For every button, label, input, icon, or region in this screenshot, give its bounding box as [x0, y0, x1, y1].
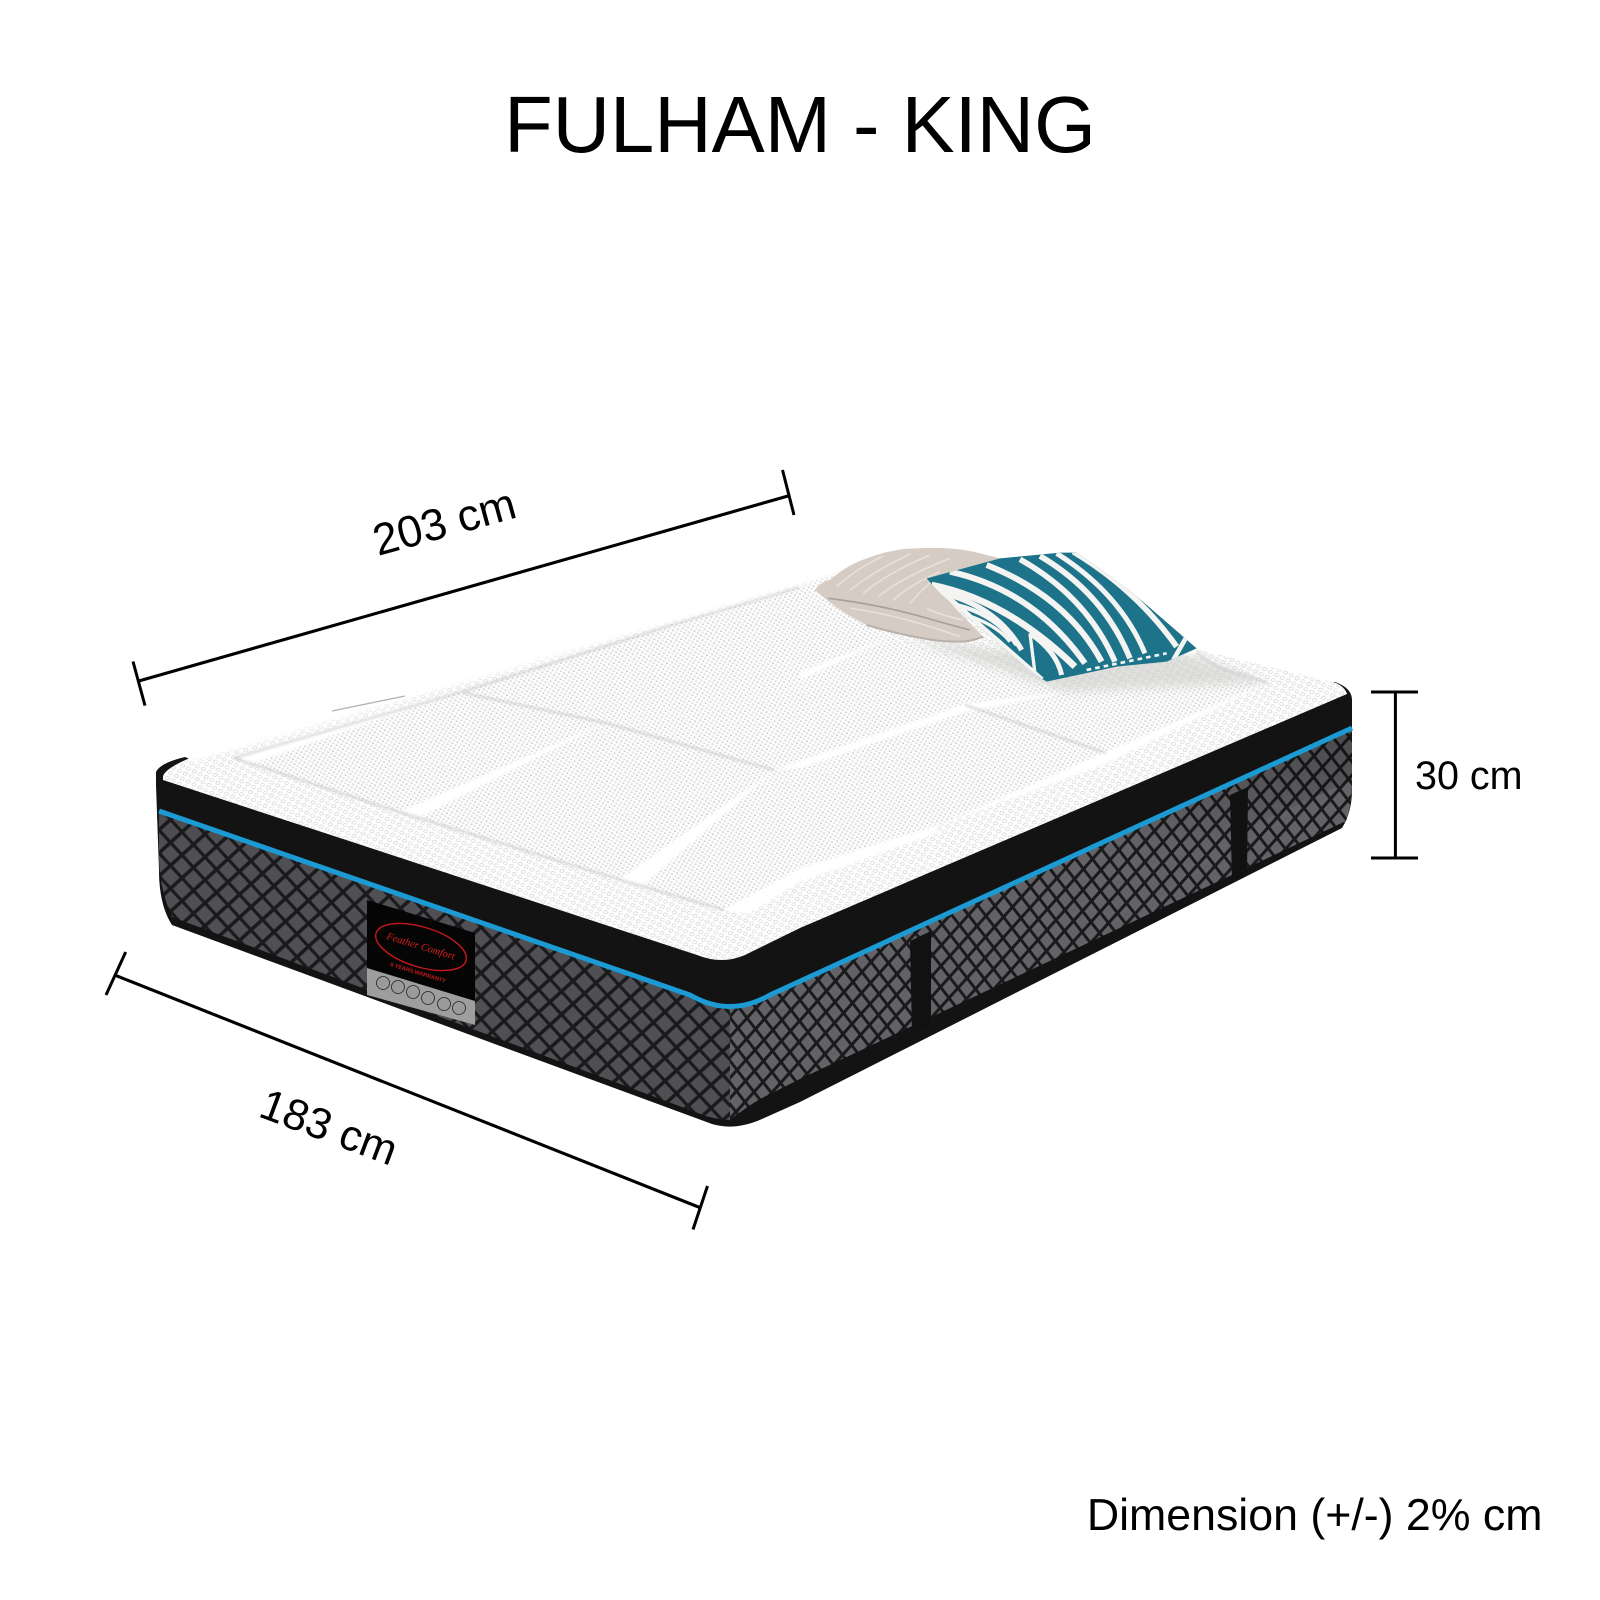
dark fold at back edge: [332, 696, 405, 711]
shadow under pillows: [900, 636, 1268, 692]
label: 30 cm: 30 cm: [1415, 754, 1523, 798]
tag black background: [367, 900, 475, 1025]
pillow: teal striped: [927, 552, 1197, 682]
quilted panel: front: [621, 705, 1106, 910]
title: FULHAM - KING: [504, 80, 1096, 169]
label: 183 cm: 183 cm: [253, 1080, 404, 1175]
soft fade of the back edge into the background: [190, 565, 1196, 757]
top surface border fabric: [163, 565, 1347, 960]
warranty text: 5 YEARS WARRANTY: [389, 962, 447, 985]
label tag: [367, 900, 475, 1025]
dimension line: length 203 cm: [133, 470, 794, 706]
blue piping: [159, 728, 1352, 1006]
quilted panel: centre: [403, 723, 774, 880]
strap: right side front: [910, 931, 931, 1033]
dimension line: height 30 cm: [1371, 692, 1418, 858]
pillow: beige: [815, 548, 1000, 642]
side panel: right quilted fabric: [730, 730, 1352, 1120]
mattress black body: [156, 682, 1352, 1127]
mattress: [156, 565, 1352, 1127]
tag grey strip: [367, 968, 475, 1025]
side panel: front quilted fabric: [159, 813, 730, 1120]
strap: right side back: [1230, 787, 1248, 881]
quilted panel: left: [234, 690, 606, 812]
dimension line: width 183 cm: [106, 952, 708, 1230]
brand ellipse: [370, 914, 472, 980]
quilted panel: upper centre: [468, 565, 905, 723]
top surface: [163, 565, 1347, 960]
label: 203 cm: 203 cm: [368, 479, 521, 566]
certification icons: [376, 976, 466, 1014]
quilted panel: right of centre: [606, 638, 1065, 770]
quilted panel: right: [965, 683, 1268, 753]
brand name: Feather Comfort: [384, 931, 457, 963]
note: dimension tolerance: Dimension (+/-) 2% cm: [1087, 1491, 1542, 1540]
quilt seams as soft white valleys: [234, 637, 1268, 914]
side shading under piping: [159, 730, 1352, 1056]
